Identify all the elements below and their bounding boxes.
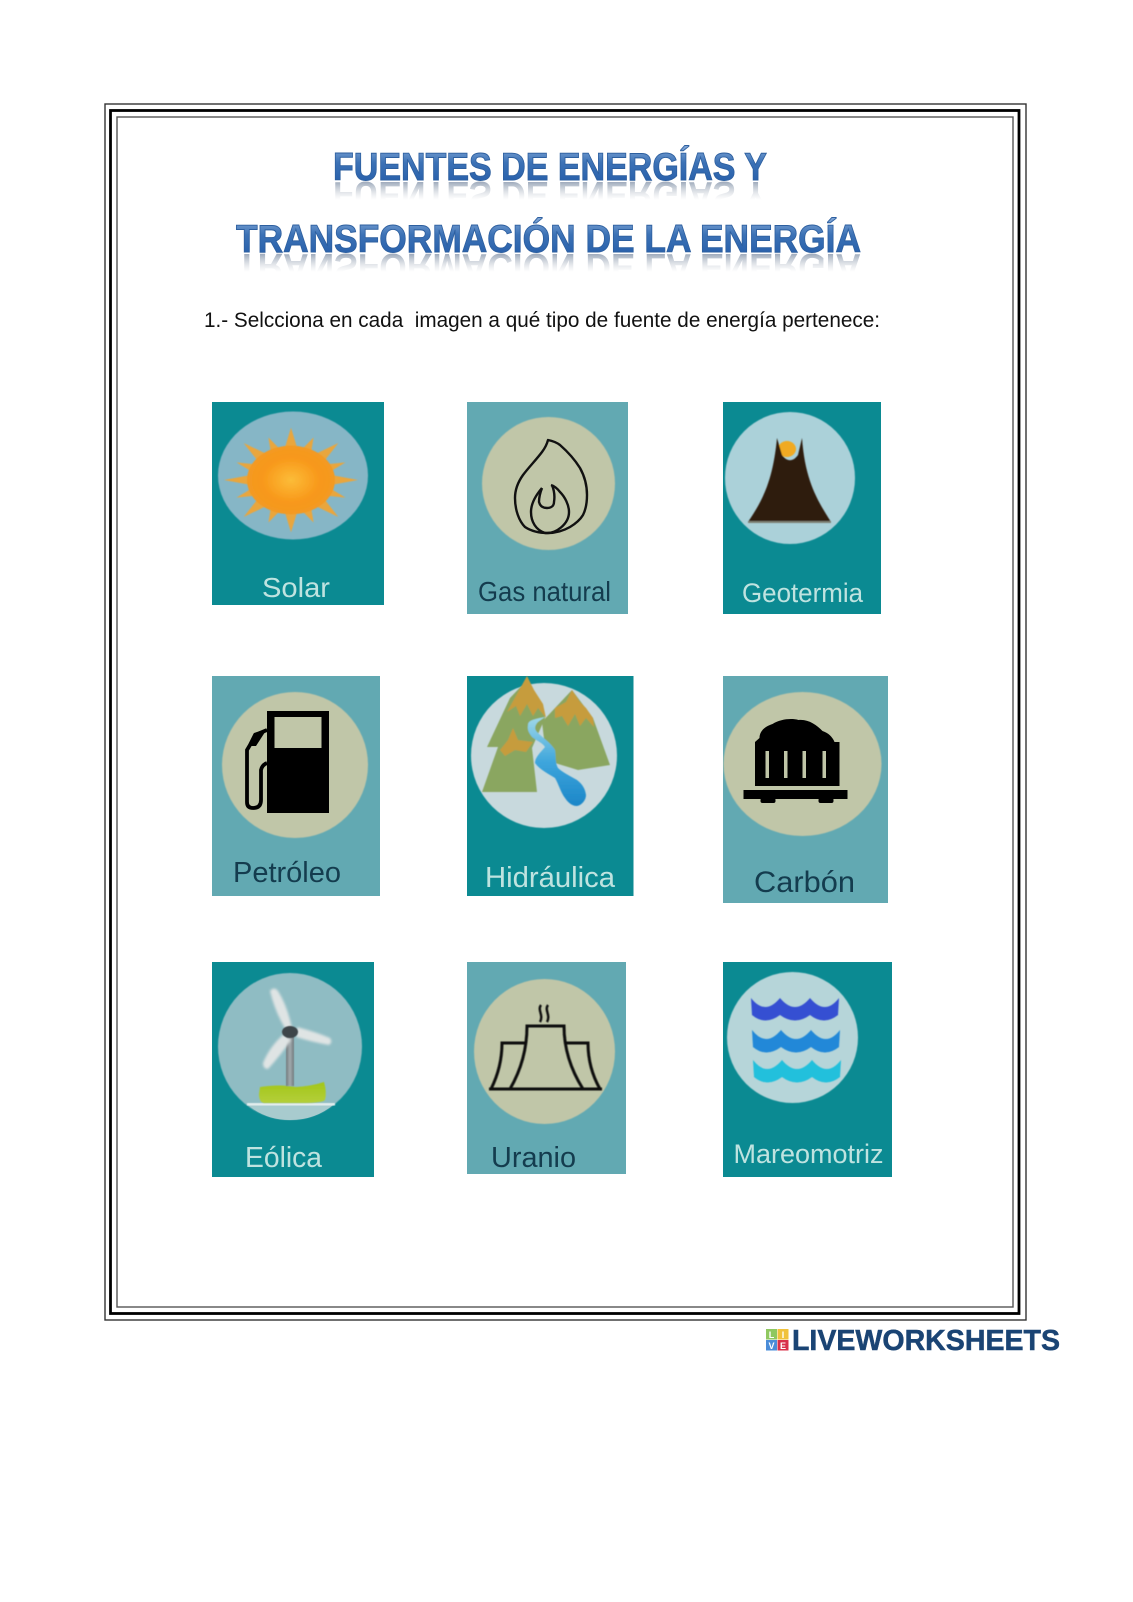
icon: fuel pump [247,711,329,813]
label: Hidráulica: Hidráulica [485,862,616,894]
title [236,145,861,289]
label: Geotermia: Geotermia [742,578,864,608]
title: FUENTES DE ENERGÍAS Y [333,173,767,217]
card: Petróleo [212,676,380,896]
title: TRANSFORMACIÓN DE LA ENERGÍA [236,217,861,261]
logo: Liveworksheets: LIVEWORKSHEETS [792,1325,1060,1357]
icon: wind turbine [247,988,335,1106]
icon: volcano [748,438,831,523]
title: TRANSFORMACIÓN DE LA ENERGÍA [236,245,861,289]
logo: Liveworksheets: I [782,1330,784,1340]
card: Eólica [212,962,374,1177]
card: Carbón [723,676,888,903]
triple-line page frame [105,104,1026,1320]
label: Petróleo: Petróleo [233,857,341,889]
card: Gas natural [467,402,628,614]
label: Uranio: Uranio [491,1142,576,1174]
logo: Liveworksheets: V [768,1341,775,1351]
label: Carbón: Carbón [754,866,855,899]
icon: mountains and river [482,676,610,806]
label: Eólica: Eólica [245,1142,323,1174]
icon: nuclear cooling towers [489,1005,602,1089]
label: Mareomotriz: Mareomotriz [734,1139,884,1169]
card: Mareomotriz [723,962,892,1177]
label: Gas natural: Gas natural [478,576,611,607]
card: Uranio [467,962,626,1174]
card: Geotermia [723,402,881,614]
icon: waves [751,998,841,1082]
instruction text: 1.- Selcciona en cada imagen a qué tipo de fuente de energía pertenece: [204,309,880,332]
label: Solar: Solar [262,572,330,603]
logo: Liveworksheets: L [769,1330,775,1340]
card: Hidráulica [467,676,634,896]
title: FUENTES DE ENERGÍAS Y [333,145,767,189]
card: Solar [212,402,384,605]
logo: Liveworksheets: E [780,1341,786,1351]
icon: sun [224,428,358,532]
icon: coal wagon [744,719,848,803]
icon: flame [515,440,587,533]
